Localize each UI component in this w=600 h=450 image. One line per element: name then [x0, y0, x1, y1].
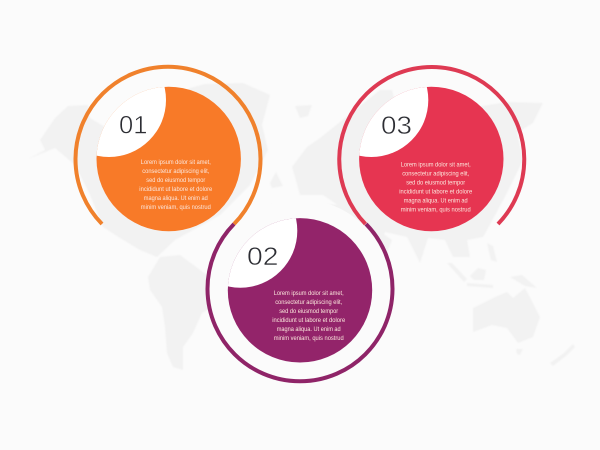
ring 02	[207, 224, 393, 381]
text block 01	[139, 159, 213, 211]
panel 02: purple circle	[206, 218, 394, 384]
text block 02: incididunt ut labore et dolore	[272, 317, 346, 324]
map: Sumatra	[447, 263, 467, 282]
map: British Isles	[270, 172, 283, 188]
text block 01: incididunt ut labore et dolore	[139, 186, 213, 193]
notch 02	[228, 218, 298, 288]
disc 01	[96, 87, 241, 231]
ring 01	[75, 67, 260, 224]
map: New Zealand	[550, 344, 575, 366]
number 01: 01	[119, 111, 148, 139]
text block 03: consectetur adipiscing elit,	[402, 170, 469, 177]
text block 02: magna aliqua. Ut enim ad	[277, 326, 341, 333]
text block 03: sed do eiusmod tempor	[406, 179, 465, 186]
number 02: 02	[247, 243, 278, 271]
disc 02	[228, 218, 372, 362]
text block 02: Lorem ipsum dolor sit amet,	[274, 290, 344, 297]
map: New Guinea	[510, 275, 537, 288]
text block 01: Lorem ipsum dolor sit amet,	[141, 159, 211, 166]
infographic canvas	[42, 64, 573, 384]
panel 03: crimson circle	[337, 65, 526, 232]
map: South America	[148, 255, 225, 370]
text block 03: magna aliqua. Ut enim ad	[404, 197, 468, 204]
map: Borneo	[470, 268, 486, 280]
text block 03: minim veniam, quis nostrud	[401, 206, 471, 213]
text block 02	[272, 290, 346, 342]
text block 02: minim veniam, quis nostrud	[274, 335, 344, 342]
text block 02: consectetur adipiscing elit,	[275, 299, 342, 306]
map: Africa	[270, 202, 392, 262]
text block 02: sed do eiusmod tempor	[279, 308, 338, 315]
disc 03	[359, 87, 503, 231]
text block 03: Lorem ipsum dolor sit amet,	[401, 161, 471, 168]
notch 01	[96, 87, 166, 157]
text block 01: minim veniam, quis nostrud	[141, 204, 211, 211]
map: Iceland and Svalbard	[295, 105, 312, 118]
map: Philippines	[487, 243, 497, 262]
map: Java	[467, 283, 493, 288]
text block 03	[399, 161, 473, 213]
panel 01: orange circle	[74, 64, 262, 232]
ring 03	[339, 67, 524, 224]
text block 01: consectetur adipiscing elit,	[142, 168, 210, 175]
map: Eurasia	[292, 90, 543, 263]
number 03: 03	[381, 112, 412, 140]
map: Tasmania	[516, 349, 523, 355]
world map backdrop	[28, 83, 575, 370]
text block 01: sed do eiusmod tempor	[146, 177, 205, 184]
notch 03	[359, 87, 428, 157]
map: Australia	[473, 288, 540, 343]
text block 01: magna aliqua. Ut enim ad	[144, 195, 208, 202]
text block 03: incididunt ut labore et dolore	[399, 188, 473, 195]
map: North America	[28, 83, 270, 257]
inner backing of circle 02	[209, 199, 391, 381]
